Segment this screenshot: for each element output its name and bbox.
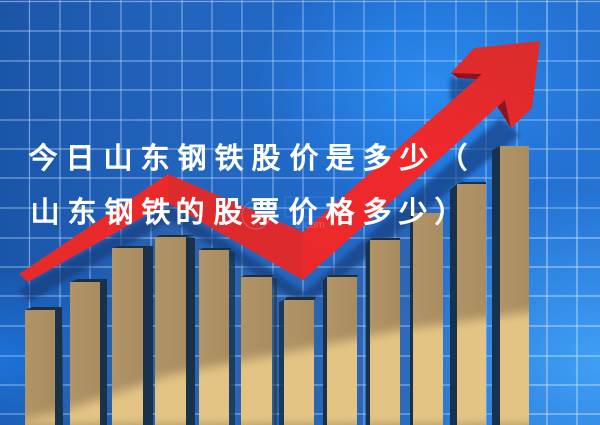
red rising arrow [19,41,540,282]
title text [28,142,468,229]
title line 1: 今日山东钢铁股价是多少（ [28,142,468,175]
arrow notch underside [451,73,483,79]
arrow body [19,41,540,282]
watermark [242,197,335,231]
title line 2: 山东钢铁的股票价格多少） [30,196,464,229]
arrow cast shadow [18,78,520,306]
bar side shadows [55,146,500,425]
watermark: e.com [295,219,325,231]
bar top edges [25,182,486,310]
bar chart: twelve tan bars [25,146,529,425]
arrow barb side [497,100,511,128]
